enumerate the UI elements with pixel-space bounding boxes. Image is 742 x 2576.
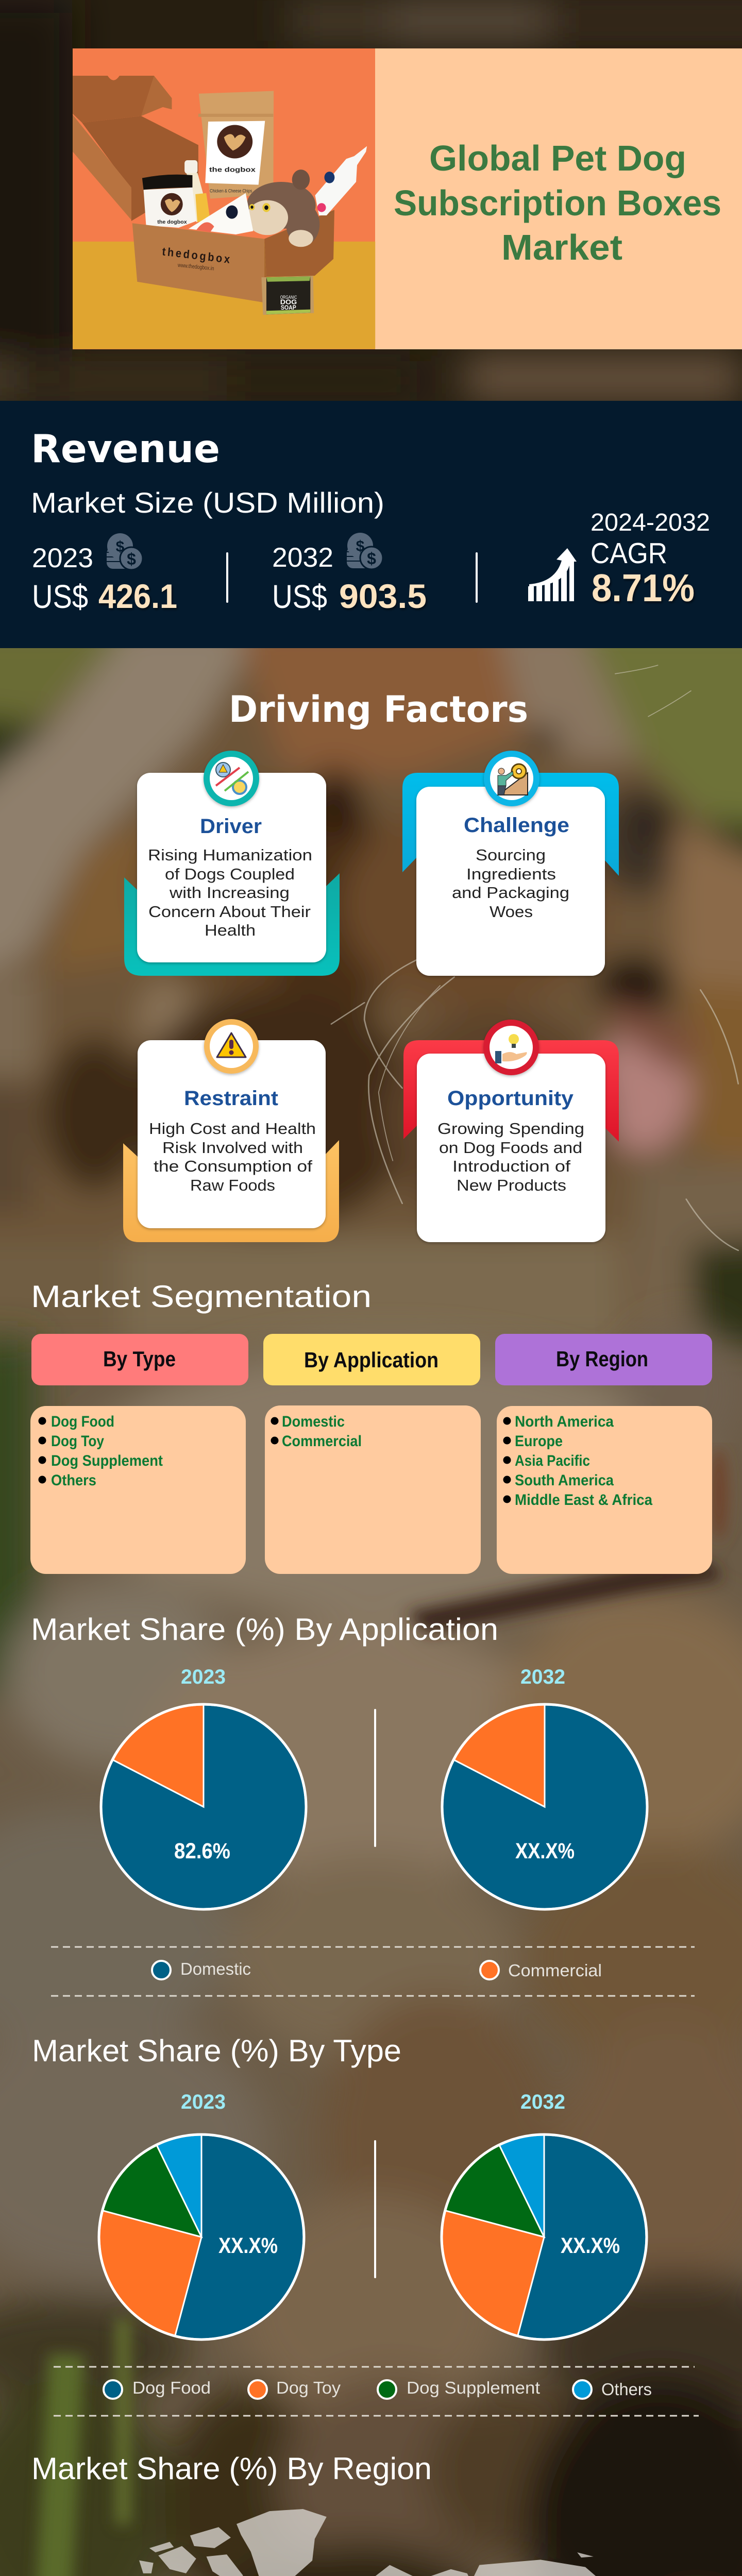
world map bbox=[72, 2509, 667, 2576]
panel: by application: Domestic bbox=[282, 1413, 345, 1430]
heading: market segmentation: Market Segmentation bbox=[31, 1279, 372, 1314]
stat: 2023: US$ bbox=[32, 578, 88, 615]
panel: restraint bbox=[123, 1019, 339, 1242]
product photo: dog box illustration: Chicken & Cheese Chips bbox=[210, 188, 252, 194]
text: restraint detail: Risk Involved with bbox=[162, 1139, 303, 1157]
legend: application: Domestic bbox=[180, 1959, 251, 1978]
title bbox=[394, 138, 721, 267]
pie: application 2032: XX.X% bbox=[515, 1839, 575, 1863]
text: driver detail: Concern About Their bbox=[148, 903, 311, 921]
legend: type: Dog Food bbox=[132, 2378, 211, 2397]
panel: by type: Dog Supplement bbox=[51, 1452, 163, 1469]
market size label: Market Size (USD Million) bbox=[31, 486, 384, 519]
panel: by region: Europe bbox=[515, 1433, 563, 1450]
text: opportunity detail: Growing Spending bbox=[437, 1120, 584, 1138]
chart: type pies: 2032 bbox=[520, 2091, 565, 2113]
panel: challenge bbox=[402, 751, 619, 976]
text: opportunity detail: on Dog Foods and bbox=[439, 1139, 582, 1157]
heading: driving factors: Driving Factors bbox=[229, 688, 528, 731]
chart: application pies bbox=[101, 1666, 647, 1909]
banner bbox=[73, 48, 742, 349]
legend: application: Commercial bbox=[508, 1961, 602, 1980]
chart: type pies bbox=[99, 2091, 647, 2340]
icon: coins 2023: $ bbox=[116, 538, 125, 555]
pie: type 2032: XX.X% bbox=[561, 2233, 620, 2258]
title: Subscription Boxes bbox=[394, 183, 721, 223]
label: challenge: Challenge bbox=[464, 814, 569, 837]
legend: type: Dog Toy bbox=[276, 2378, 341, 2397]
panel: by region: South America bbox=[515, 1472, 614, 1489]
stat: cagr: CAGR bbox=[591, 537, 667, 570]
stat: 2032: 903.5 bbox=[339, 577, 427, 615]
product photo: dog box illustration: thedogbox bbox=[162, 245, 230, 266]
panel: by type: By Type bbox=[103, 1347, 176, 1371]
product photo: dog box illustration: the dogbox bbox=[209, 166, 256, 174]
panel: driver bbox=[124, 751, 340, 976]
icon: coins 2023 bbox=[107, 533, 143, 570]
legend: type: Dog Supplement bbox=[407, 2378, 540, 2397]
panel: by type: Dog Food bbox=[51, 1413, 114, 1430]
stat: 2023 bbox=[32, 533, 177, 615]
chart: application pies: 2023 bbox=[181, 1666, 226, 1688]
text: restraint detail: High Cost and Health bbox=[149, 1120, 316, 1138]
product photo: dog box illustration: the dogbox bbox=[157, 219, 187, 225]
panel: by type: Dog Toy bbox=[51, 1433, 104, 1450]
top background bbox=[0, 0, 742, 402]
panel: by type: Others bbox=[51, 1472, 96, 1489]
panel: by region bbox=[495, 1334, 712, 1574]
stat: cagr: 8.71% bbox=[592, 566, 695, 609]
pie: type 2023 bbox=[99, 2134, 304, 2340]
icon: coins 2023: $ bbox=[127, 550, 136, 568]
text: restraint detail bbox=[149, 1120, 316, 1194]
stat: cagr: 2024-2032 bbox=[591, 509, 710, 536]
text: restraint detail: Raw Foods bbox=[190, 1176, 275, 1194]
text: driver detail: with Increasing bbox=[169, 884, 290, 902]
panel: by type bbox=[30, 1334, 248, 1574]
panel: revenue bbox=[0, 401, 742, 648]
product photo: dog box illustration bbox=[73, 76, 375, 349]
heading: market share by application: Market Share (%) By Application bbox=[31, 1612, 498, 1647]
label: restraint: Restraint bbox=[184, 1087, 278, 1110]
label: driver: Driver bbox=[200, 815, 262, 838]
text: restraint detail: the Consumption of bbox=[154, 1157, 312, 1175]
text: challenge detail bbox=[452, 846, 569, 921]
chart: type pies: 2023 bbox=[181, 2091, 226, 2113]
pie: type 2023: XX.X% bbox=[218, 2233, 278, 2258]
stat: 2032: 2032 bbox=[272, 543, 333, 573]
text: driver detail: Health bbox=[205, 921, 256, 939]
chart: application pies: 2032 bbox=[520, 1666, 565, 1688]
stat: cagr bbox=[591, 509, 710, 609]
panel: by region: North America bbox=[515, 1413, 614, 1430]
legend: type bbox=[104, 2378, 652, 2399]
stat: 2032 bbox=[272, 533, 427, 615]
panel: by region: Asia Pacific bbox=[515, 1452, 590, 1469]
product photo: dog box illustration: ORGANIC bbox=[280, 294, 297, 300]
stat: 2023: 426.1 bbox=[98, 577, 177, 615]
background: dog photo bbox=[0, 622, 742, 2576]
icon: opportunity bbox=[483, 1020, 539, 1075]
legend: application bbox=[152, 1959, 602, 1980]
icon: growth arrow bbox=[528, 548, 577, 601]
icon: coins 2032: $ bbox=[367, 549, 376, 568]
text: opportunity detail: Introduction of bbox=[452, 1157, 570, 1175]
heading: market share by type: Market Share (%) By Type bbox=[32, 2033, 401, 2068]
legend: type: Others bbox=[601, 2380, 652, 2399]
text: challenge detail: Woes bbox=[490, 903, 533, 921]
panel: opportunity bbox=[403, 1020, 619, 1242]
panel: by application bbox=[263, 1334, 481, 1574]
pie: type 2032 bbox=[442, 2134, 647, 2340]
stat: 2023: 2023 bbox=[32, 543, 93, 573]
icon: restraint bbox=[204, 1019, 259, 1074]
pie: application 2023: 82.6% bbox=[174, 1839, 230, 1863]
text: driver detail: Rising Humanization bbox=[148, 846, 312, 864]
product photo: dog box illustration: DOG bbox=[280, 298, 297, 306]
text: driver detail bbox=[148, 846, 312, 939]
panel: by application: By Application bbox=[304, 1348, 439, 1372]
icon: challenge bbox=[484, 751, 539, 806]
product photo: dog box illustration: www.thedogbox.in bbox=[177, 262, 214, 272]
product photo: dog box illustration: SOAP bbox=[281, 305, 296, 311]
text: challenge detail: and Packaging bbox=[452, 884, 569, 902]
text: opportunity detail bbox=[437, 1120, 584, 1194]
stat: 2032: US$ bbox=[272, 578, 327, 615]
title: Global Pet Dog bbox=[429, 138, 686, 178]
panel: by region: Middle East & Africa bbox=[515, 1492, 652, 1509]
text: challenge detail: Ingredients bbox=[466, 865, 556, 883]
heading: revenue: Revenue bbox=[31, 426, 220, 471]
text: driver detail: of Dogs Coupled bbox=[165, 865, 295, 883]
label: opportunity: Opportunity bbox=[447, 1087, 574, 1110]
icon: driver bbox=[204, 751, 259, 806]
text: opportunity detail: New Products bbox=[457, 1176, 566, 1194]
panel: by application: Commercial bbox=[282, 1433, 362, 1450]
text: challenge detail: Sourcing bbox=[476, 846, 546, 864]
icon: coins 2032 bbox=[347, 533, 383, 569]
panel: by region: By Region bbox=[556, 1347, 648, 1371]
pie: application 2023 bbox=[101, 1704, 306, 1909]
icon: coins 2032: $ bbox=[356, 538, 365, 555]
pie: application 2032 bbox=[442, 1704, 647, 1909]
heading: market share by region: Market Share (%) By Region bbox=[31, 2451, 432, 2486]
title: Market bbox=[501, 227, 622, 267]
